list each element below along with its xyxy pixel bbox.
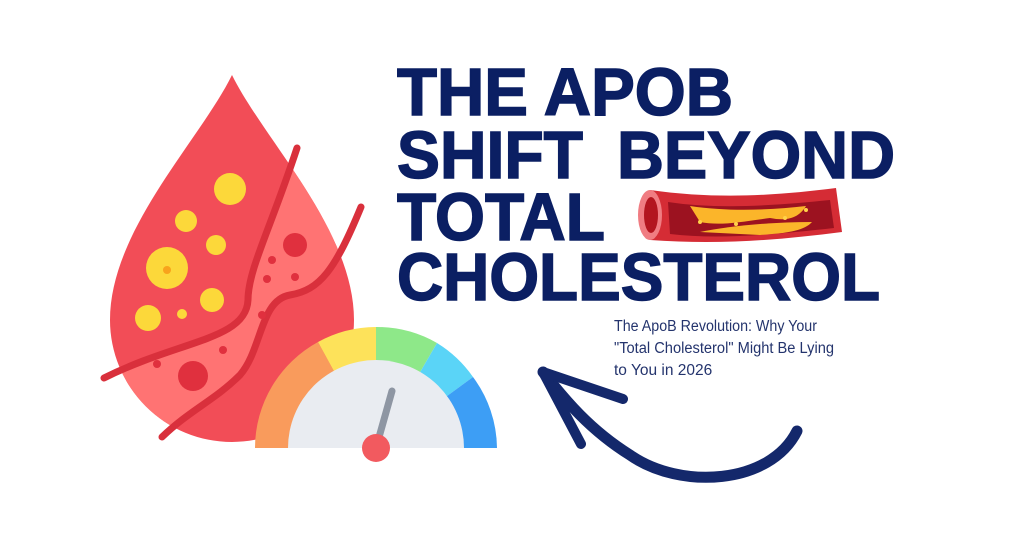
subtitle text: to You in 2026 xyxy=(614,362,712,379)
icon: clogged artery xyxy=(638,188,842,242)
yellow fat particles xyxy=(135,173,246,331)
subtitle text xyxy=(614,318,834,379)
icon: blood drop with artery xyxy=(104,75,361,442)
icon: gauge meter xyxy=(255,327,497,462)
title: CHOLESTEROL xyxy=(397,240,880,315)
title: THE APOB xyxy=(397,55,733,130)
subtitle text: The ApoB Revolution: Why Your xyxy=(614,318,817,335)
title: TOTAL xyxy=(397,180,605,255)
subtitle text: "Total Cholesterol" Might Be Lying xyxy=(614,340,834,357)
title: SHIFT xyxy=(397,118,583,193)
title: BEYOND xyxy=(617,118,895,193)
arrow: curved pointing to gauge xyxy=(543,372,797,477)
title xyxy=(397,55,895,315)
